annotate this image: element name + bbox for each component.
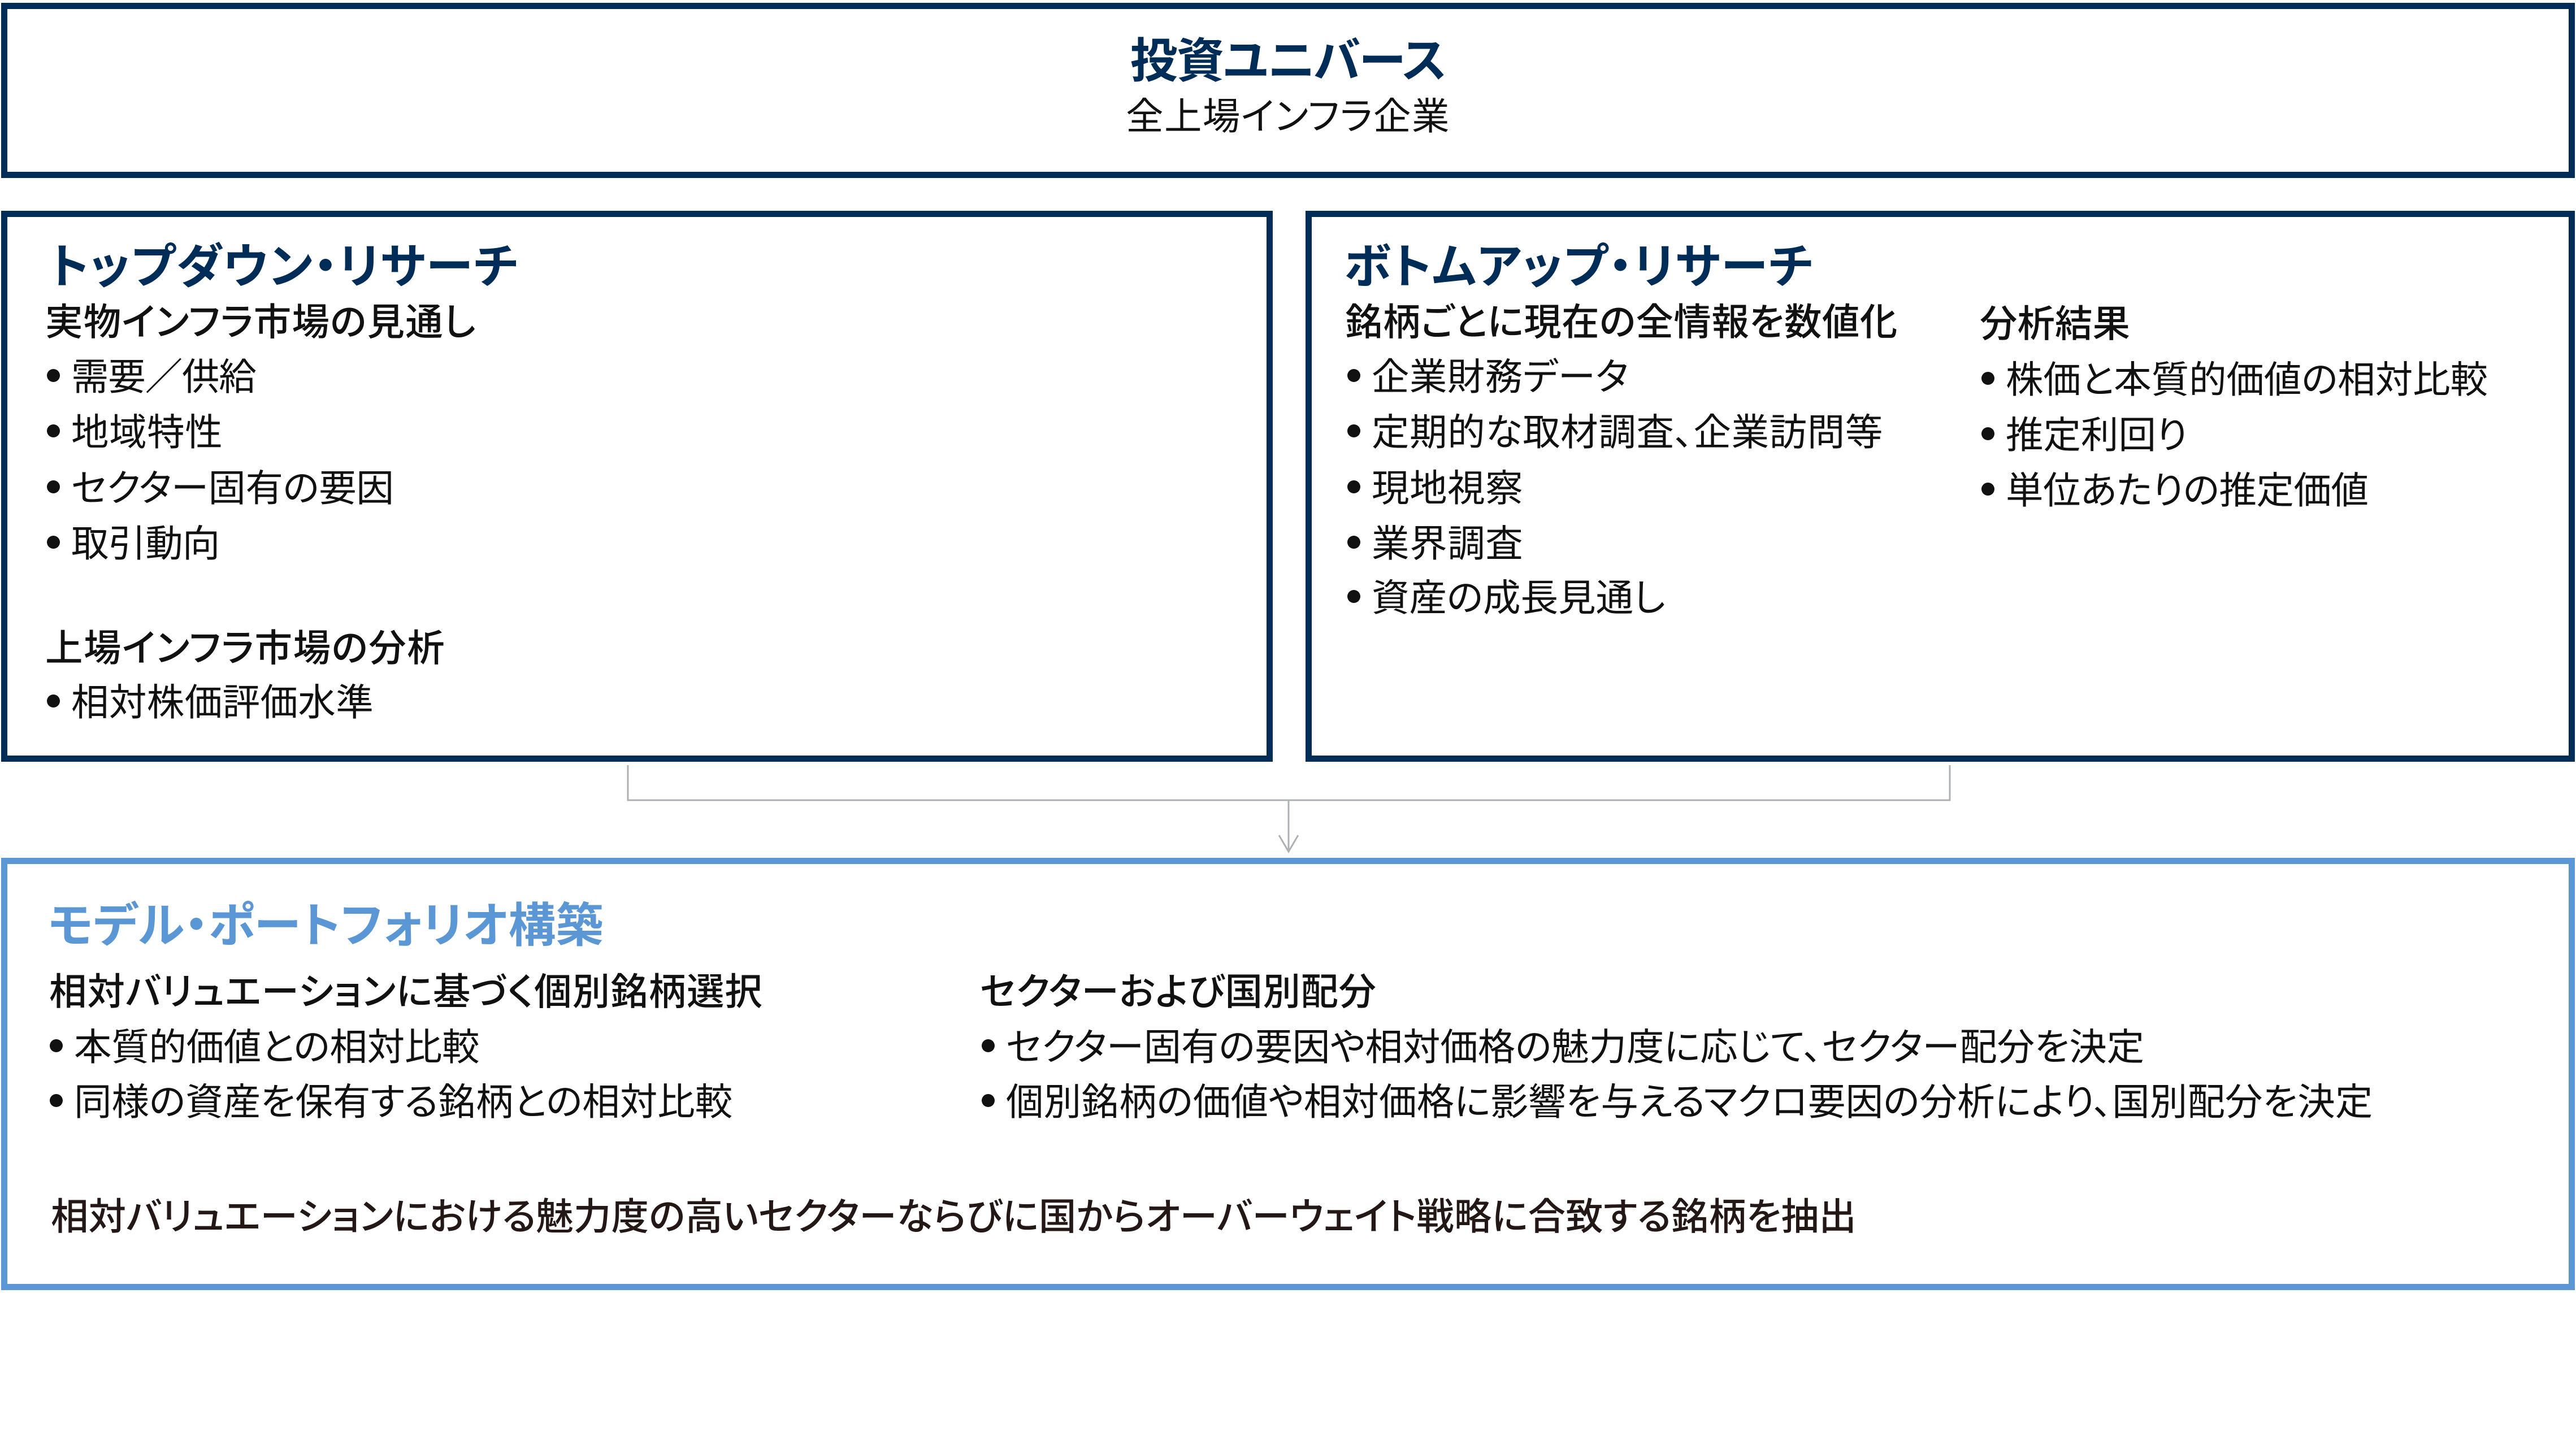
panel: top-down research — [1, 211, 1273, 762]
text: all listed infrastructure companies: 全上場インフラ企業 — [1126, 86, 1450, 141]
panel: bottom-up research — [1306, 211, 2575, 762]
heading: bottom-up research: ボトムアップ・リサーチ — [1344, 229, 1814, 297]
bullet: estimated value per unit: 単位あたりの推定価値 — [2006, 461, 2368, 515]
bullet: price vs intrinsic value: 株価と本質的価値の相対比較 — [2006, 350, 2488, 404]
subheading: sector and country allocation: セクターおよび国別配分 — [980, 962, 1377, 1016]
bullet: sector allocation: セクター固有の要因や相対価格の魅力度に応じて、セクター配分を決定 — [1006, 1017, 2144, 1071]
bullet: comparison to similar assets: 同様の資産を保有する銘柄との相対比較 — [74, 1072, 732, 1126]
heading: investment universe: 投資ユニバース — [1130, 23, 1446, 92]
heading: top-down research: トップダウン・リサーチ — [49, 229, 519, 297]
bullet: industry research: 業界調査 — [1372, 514, 1523, 568]
bullet: sector-specific factors: セクター固有の要因 — [71, 458, 393, 513]
bullet: financial data: 企業財務データ — [1372, 347, 1629, 401]
arrow: connector from research panels to model portfolio — [627, 765, 1951, 853]
bullet: transaction trends: 取引動向 — [71, 514, 219, 568]
bullet: relative valuation level: 相対株価評価水準 — [71, 672, 374, 727]
bullet: comparison to intrinsic value: 本質的価値との相対比較 — [74, 1017, 479, 1071]
subheading: stock selection based on relative valuation: 相対バリュエーションに基づく個別銘柄選択 — [49, 962, 763, 1016]
subheading: real asset market outlook: 実物インフラ市場の見通し — [45, 292, 476, 346]
text: summary of stock extraction: 相対バリュエーションにおける魅力度の高いセクターならびに国からオーバーウェイト戦略に合致する銘柄を抽出 — [51, 1187, 1857, 1241]
bullet: regional characteristics: 地域特性 — [71, 402, 223, 457]
panel: model portfolio construction — [1, 858, 2575, 1290]
subheading: analysis results: 分析結果 — [1980, 294, 2130, 348]
panel: investment universe — [1, 3, 2575, 178]
bullet: asset growth outlook: 資産の成長見通し — [1372, 568, 1665, 622]
bullet: site visits: 現地視察 — [1372, 458, 1523, 513]
bullet: estimated yield: 推定利回り — [2006, 405, 2187, 459]
bullet: regular research and company visits: 定期的な取材調査、企業訪問等 — [1372, 402, 1883, 457]
bullet: supply and demand: 需要／供給 — [71, 347, 255, 401]
subheading: quantify all current information by stock: 銘柄ごとに現在の全情報を数値化 — [1345, 292, 1898, 346]
subheading: listed infrastructure market analysis: 上場インフラ市場の分析 — [45, 618, 445, 672]
heading: model portfolio construction: モデル・ポートフォリオ構築 — [48, 888, 604, 956]
bullet: country allocation: 個別銘柄の価値や相対価格に影響を与えるマクロ要因の分析により、国別配分を決定 — [1006, 1072, 2373, 1126]
